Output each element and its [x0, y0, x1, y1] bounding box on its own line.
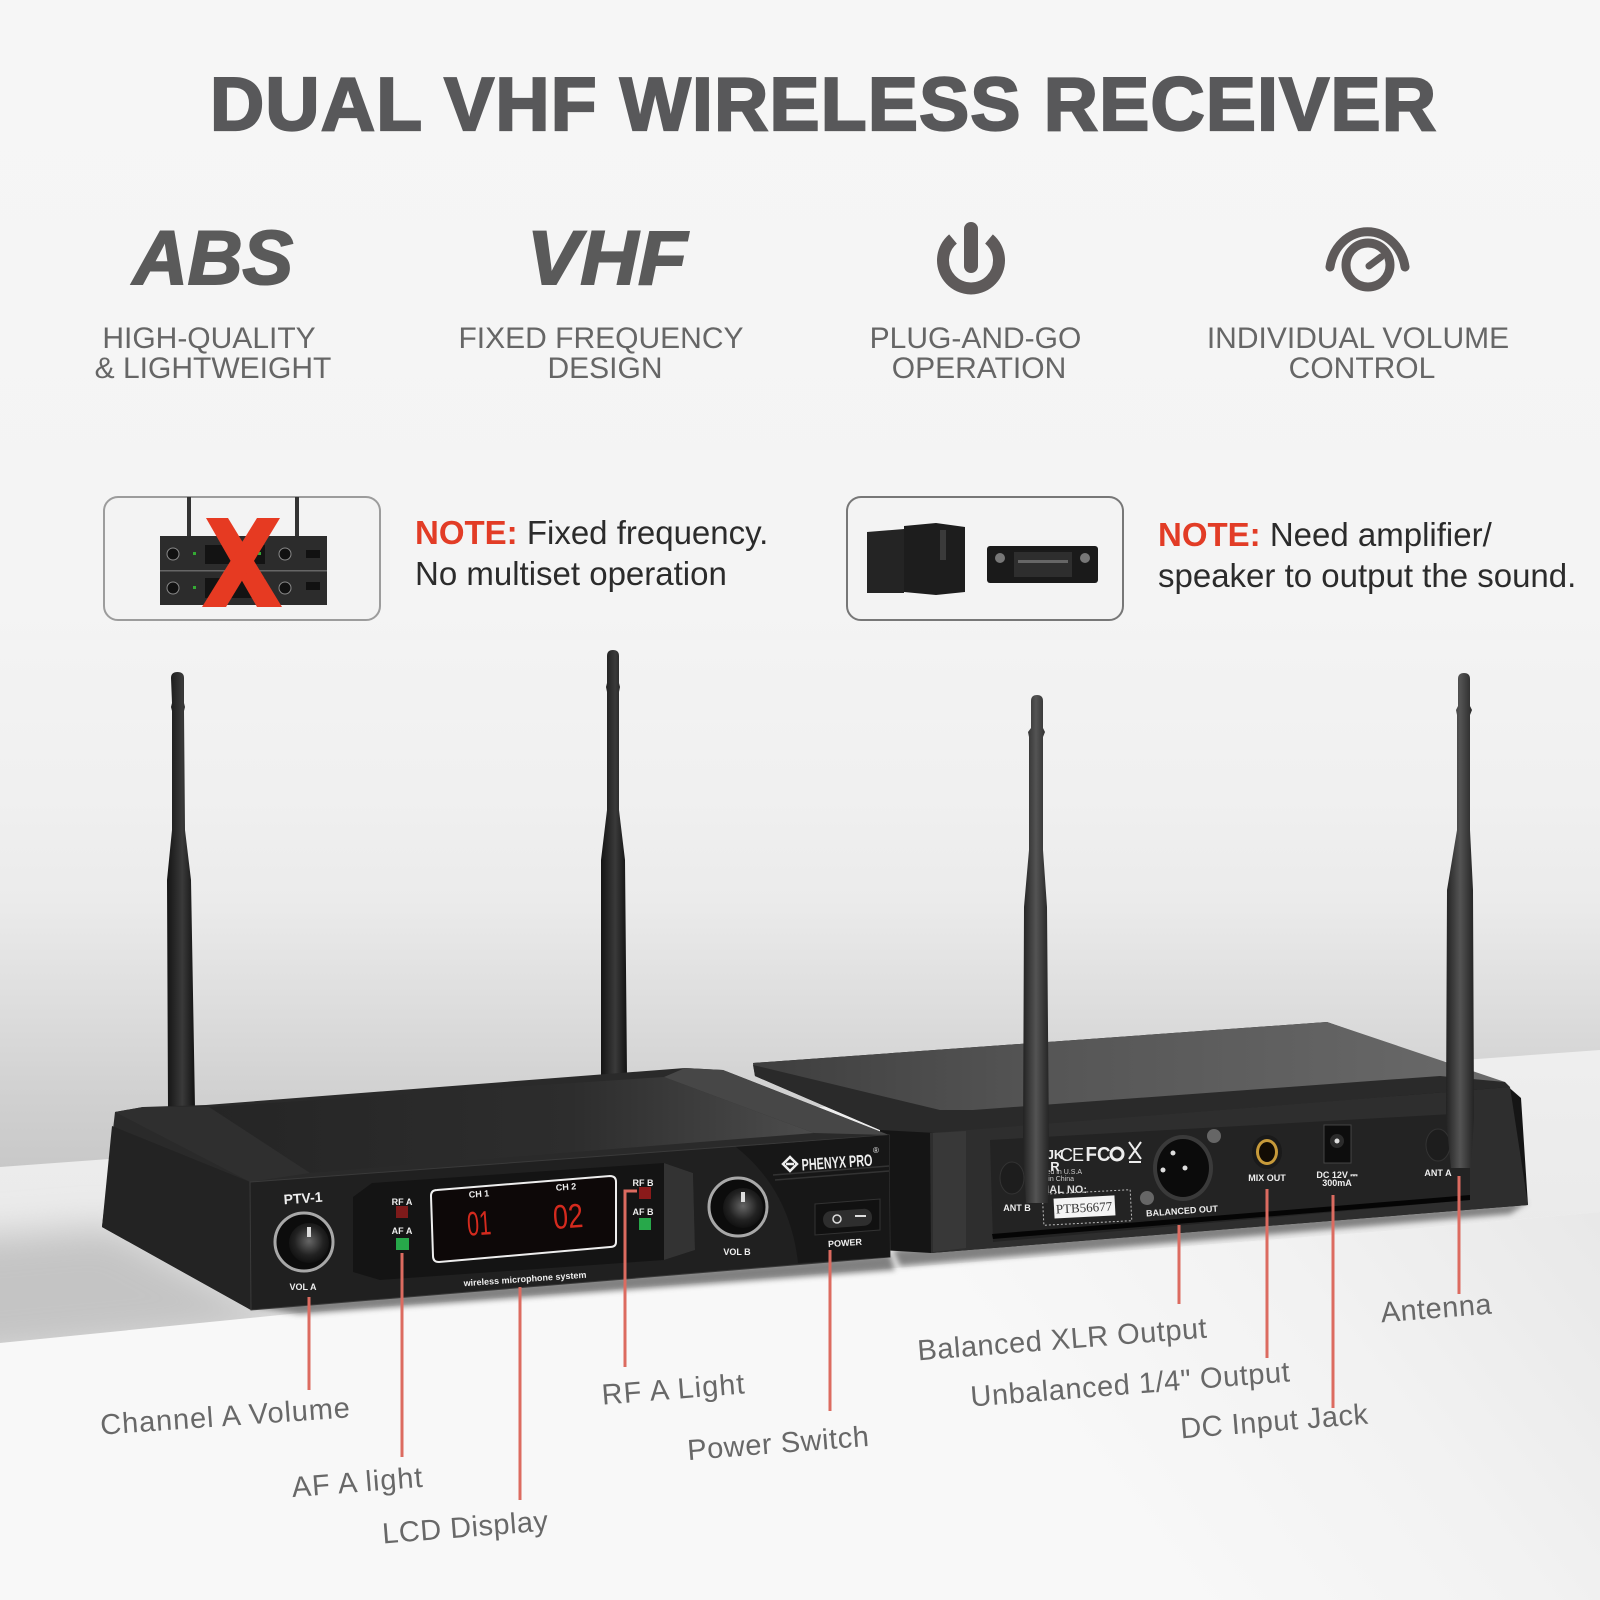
text: wireless microphone system: wireless microphone system	[462, 1270, 587, 1288]
channel B lights	[632, 1178, 654, 1230]
leader: RF A light	[625, 1191, 637, 1367]
XLR output	[1140, 1129, 1221, 1219]
LCD display: 01	[466, 1204, 492, 1244]
right ridge	[664, 1068, 889, 1135]
feature: VHF	[458, 216, 744, 385]
feature: volume	[1207, 232, 1509, 385]
model label: PTV-1	[283, 1189, 323, 1207]
rear face	[930, 1087, 1528, 1253]
callout: antenna: Antenna	[1379, 1289, 1494, 1329]
callout: DC input jack: DC Input Jack	[1179, 1399, 1370, 1445]
mix out jack	[1248, 1135, 1286, 1183]
callout: AF A light: AF A light	[291, 1462, 424, 1504]
leader: power switch	[828, 1250, 832, 1411]
DC jack	[1316, 1125, 1358, 1188]
label POWER: POWER	[828, 1237, 863, 1249]
label: volume control: INDIVIDUAL VOLUME	[1207, 322, 1509, 355]
leader: unbalanced output	[1266, 1189, 1268, 1358]
channel B lights: AF B	[632, 1207, 654, 1217]
rear receiver body	[753, 1022, 1528, 1253]
left side face	[102, 1126, 251, 1310]
background wall	[0, 0, 1600, 1170]
regulatory marks: CE	[1060, 1145, 1084, 1165]
LCD display: CH 2	[555, 1181, 577, 1193]
panel: amplifier note thumbnail	[847, 497, 1123, 620]
icon: VHF lettering: VHF	[527, 216, 690, 301]
label: fixed frequency: DESIGN	[547, 352, 663, 385]
antenna: front rear-side	[601, 650, 627, 1076]
channel A lights: RF A	[392, 1197, 413, 1207]
feature: plug and go	[870, 229, 1081, 385]
brand panel: ®	[873, 1146, 879, 1155]
callout: channel A volume: Channel A Volume	[99, 1392, 351, 1442]
label: fixed frequency: FIXED FREQUENCY	[458, 322, 744, 355]
brand panel	[736, 1135, 890, 1263]
feature: ABS	[95, 216, 331, 385]
left ridge	[115, 1107, 310, 1182]
rear receiver	[753, 1022, 1528, 1253]
note: amplifier: speaker to output the sound.	[1158, 557, 1576, 594]
leader: antenna	[1458, 1176, 1460, 1294]
regulatory marks: ERIAL NO:	[1031, 1184, 1087, 1196]
channel B lights: RF B	[632, 1178, 654, 1188]
callout: power switch: Power Switch	[686, 1421, 870, 1467]
label: volume control: CONTROL	[1289, 352, 1435, 385]
antenna A connector	[1426, 1129, 1450, 1161]
serial label	[1042, 1190, 1132, 1225]
table top surface	[0, 1050, 1600, 1343]
icon: volume dial	[1330, 232, 1405, 287]
antenna: rear right	[1446, 673, 1474, 1168]
regulatory marks: e in China	[1042, 1176, 1074, 1183]
label VOL B: VOL B	[723, 1247, 751, 1257]
front receiver	[102, 1068, 890, 1310]
label ANT B: ANT B	[1003, 1203, 1031, 1213]
panel: multiset note thumbnail	[104, 497, 380, 620]
label: high quality: HIGH-QUALITY	[102, 322, 316, 355]
channel A lights	[392, 1197, 413, 1250]
note: fixed frequency: NOTE: Fixed frequency.	[415, 514, 768, 551]
LCD display	[431, 1176, 616, 1262]
leader: AF A light	[400, 1253, 404, 1457]
icon: power button	[943, 229, 999, 288]
knob: volume A	[275, 1213, 333, 1271]
leader: channel A volume	[308, 1297, 310, 1390]
regulatory marks: FC	[1086, 1144, 1110, 1166]
rear corner pillar	[933, 1131, 966, 1252]
serial label: PTB56677	[1056, 1199, 1113, 1216]
icon: red cross	[202, 518, 282, 607]
title: DUAL VHF WIRELESS RECEIVER	[210, 62, 1436, 146]
leader: DC jack	[1332, 1195, 1334, 1408]
leader: balanced XLR	[1178, 1225, 1180, 1304]
cast shadow on table	[0, 1202, 1600, 1600]
note: fixed frequency: No multiset operation	[415, 555, 727, 592]
leader: LCD display	[518, 1287, 522, 1500]
body side and top	[102, 1068, 890, 1310]
label: high quality: & LIGHTWEIGHT	[95, 352, 331, 385]
note: amplifier: NOTE: Need amplifier/	[1158, 516, 1492, 553]
regulatory marks: JK	[1047, 1147, 1064, 1162]
brand panel: PHENYX PRO	[801, 1152, 873, 1174]
label VOL A: VOL A	[289, 1282, 317, 1292]
callout: balanced XLR output: Balanced XLR Output	[916, 1313, 1208, 1367]
antenna: front left	[167, 672, 195, 1108]
LCD display: 02	[552, 1197, 584, 1237]
display housing	[353, 1163, 695, 1280]
callout: unbalanced output: Unbalanced 1/4" Output	[969, 1356, 1291, 1414]
mix out jack: MIX OUT	[1248, 1173, 1286, 1183]
callout: RF A light: RF A Light	[601, 1368, 746, 1412]
callout: LCD display: LCD Display	[381, 1505, 550, 1550]
icon: ABS lettering: ABS	[131, 216, 293, 301]
regulatory marks	[1031, 1142, 1141, 1196]
label: plug and go: OPERATION	[892, 352, 1066, 385]
channel A lights: AF A	[392, 1226, 413, 1236]
DC jack: DC 12V ⎓	[1316, 1170, 1358, 1180]
front face	[250, 1135, 890, 1310]
LCD display: CH 1	[468, 1188, 490, 1200]
rear top plate	[753, 1022, 1505, 1130]
knob: volume B	[709, 1178, 767, 1236]
power switch	[815, 1199, 880, 1235]
regulatory marks: R	[1050, 1159, 1060, 1174]
top plate	[209, 1077, 814, 1173]
regulatory marks: igned in U.S.A	[1037, 1169, 1082, 1176]
label: plug and go: PLUG-AND-GO	[870, 322, 1081, 355]
DC jack: 300mA	[1322, 1178, 1352, 1188]
antenna: rear left	[1023, 695, 1049, 1203]
label ANT A: ANT A	[1424, 1168, 1452, 1178]
antenna connectors	[1000, 1162, 1024, 1194]
XLR output: BALANCED OUT	[1146, 1203, 1219, 1219]
